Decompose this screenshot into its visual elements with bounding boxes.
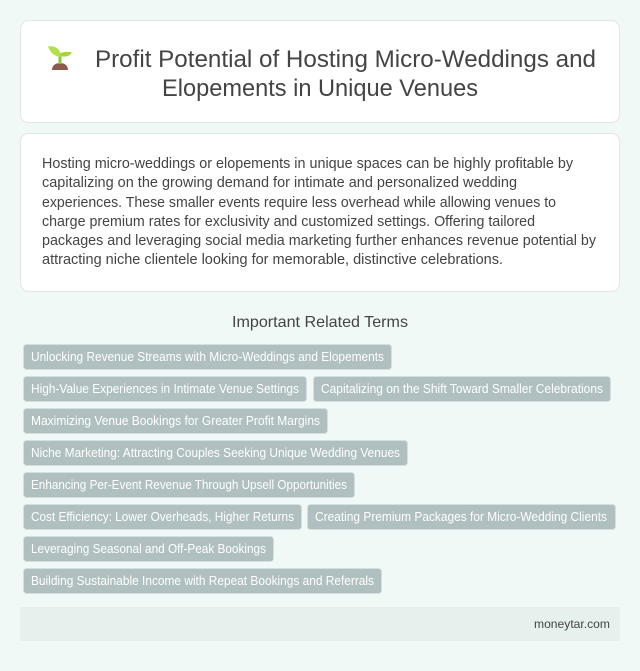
tag — [308, 504, 616, 530]
description text — [42, 156, 597, 268]
tag: Capitalizing on the Shift Toward Smaller Celebrations — [321, 382, 603, 396]
icon: seedling — [48, 46, 72, 70]
description text: packages and leveraging social media marketing further enhances revenue potential by — [42, 233, 597, 249]
title text: Elopements in Unique Venues — [162, 75, 478, 102]
description text: attracting niche clientele looking for memorable, distinctive celebrations. — [42, 252, 503, 268]
title text — [95, 46, 596, 102]
tag: High-Value Experiences in Intimate Venue Settings — [31, 382, 299, 396]
title text: Profit Potential of Hosting Micro-Weddings and — [95, 46, 596, 73]
tag — [314, 376, 610, 402]
tag: Unlocking Revenue Streams with Micro-Weddings and Elopements — [31, 350, 384, 364]
tag — [24, 472, 354, 498]
description text: capitalizing on the growing demand for intimate and personalized wedding — [42, 175, 517, 191]
description text: Hosting micro-weddings or elopements in unique spaces can be highly profitable by — [42, 156, 574, 172]
tag: Building Sustainable Income with Repeat Bookings and Referrals — [31, 574, 374, 588]
tag — [24, 440, 408, 466]
tag — [24, 408, 328, 434]
tag: Leveraging Seasonal and Off-Peak Bookings — [31, 542, 266, 556]
tag: Cost Efficiency: Lower Overheads, Higher Returns — [31, 510, 294, 524]
panel: description — [20, 134, 620, 292]
tag: Niche Marketing: Attracting Couples Seeking Unique Wedding Venues — [31, 446, 400, 460]
footer source: moneytar.com — [534, 617, 610, 631]
description text: experiences. These smaller events require less overhead while allowing venues to — [42, 195, 556, 211]
tag: Creating Premium Packages for Micro-Wedding Clients — [315, 510, 607, 524]
tag — [24, 536, 274, 562]
footer bar — [20, 607, 620, 641]
tag — [24, 568, 382, 594]
tag — [24, 504, 302, 530]
panel: title card — [20, 20, 620, 122]
tag — [24, 344, 392, 370]
tag: Maximizing Venue Bookings for Greater Profit Margins — [31, 414, 320, 428]
heading: important related terms: Important Related Terms — [232, 314, 408, 331]
tag list — [24, 344, 616, 594]
description text: charge premium rates for exclusivity and customized settings. Offering tailored — [42, 214, 535, 230]
tag: Enhancing Per-Event Revenue Through Upsell Opportunities — [31, 478, 347, 492]
tag — [24, 376, 306, 402]
